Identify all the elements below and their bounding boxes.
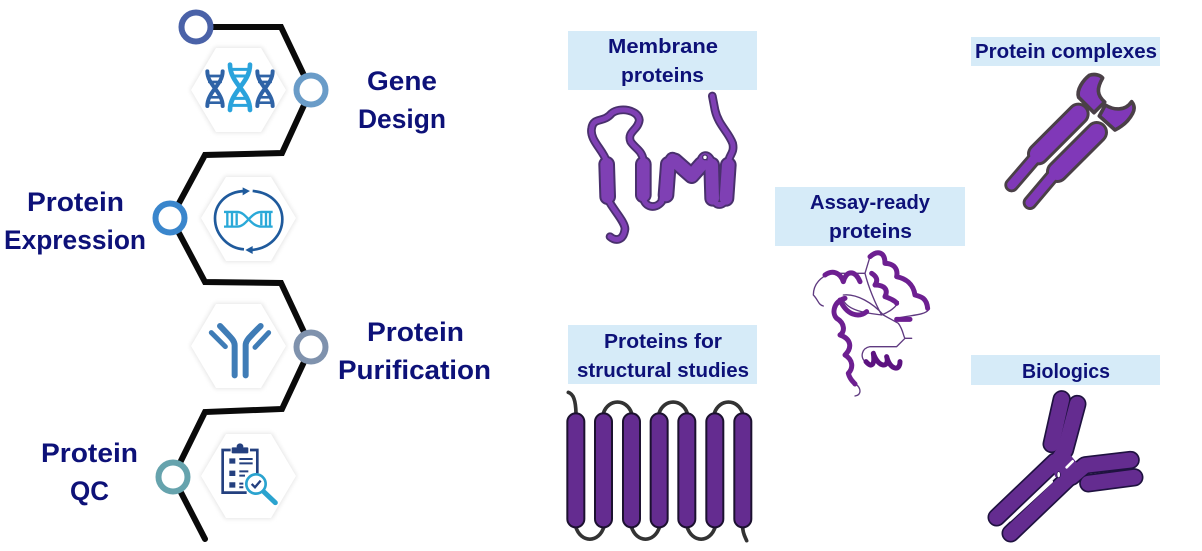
panel: membrane proteins: Membrane bbox=[608, 36, 718, 58]
node: protein purification bbox=[296, 332, 326, 362]
panel: assay-ready proteins bbox=[775, 187, 965, 396]
heading: protein expression: Expression bbox=[4, 225, 146, 255]
node: gene start bbox=[182, 12, 210, 42]
heading: protein purification: Protein bbox=[367, 317, 464, 347]
heading: protein purification: Purification bbox=[338, 355, 491, 385]
heading: gene design: Design bbox=[358, 104, 446, 134]
icon: antibody bbox=[211, 326, 269, 375]
node: protein QC bbox=[158, 462, 188, 492]
node: gene design bbox=[296, 76, 326, 104]
panel: proteins for structural studies: structural studies bbox=[577, 360, 749, 382]
heading: protein QC: Protein bbox=[41, 438, 138, 468]
heading: protein expression: Protein bbox=[27, 187, 124, 217]
workflow connector line bbox=[171, 27, 311, 539]
panel: proteins for structural studies: Proteins for bbox=[604, 331, 722, 353]
icon: protein complex bbox=[1012, 75, 1134, 203]
panel: proteins for structural studies bbox=[567, 325, 757, 541]
panel: protein complexes bbox=[971, 37, 1160, 203]
panel: membrane proteins: proteins bbox=[621, 65, 704, 87]
ribbon: membrane protein bbox=[591, 96, 733, 239]
icon: DNA cycle bbox=[215, 187, 282, 254]
panel: membrane proteins bbox=[568, 31, 757, 239]
icon: antibody bbox=[997, 399, 1134, 533]
panel: assay-ready proteins: Assay-ready bbox=[810, 192, 931, 214]
panel: protein complexes: Protein complexes bbox=[975, 41, 1157, 63]
heading: protein QC: QC bbox=[70, 476, 109, 506]
panel: biologics: Biologics bbox=[1022, 361, 1110, 383]
diagram: transmembrane helices bbox=[567, 392, 751, 541]
hexagon: protein QC bbox=[200, 433, 297, 519]
hexagon: protein expression bbox=[200, 176, 297, 262]
panel: biologics bbox=[971, 355, 1160, 533]
ribbon: protein structure bbox=[813, 252, 928, 396]
hexagon: protein purification bbox=[190, 303, 287, 389]
icon: clipboard with magnifier bbox=[223, 443, 275, 503]
hexagon: gene design bbox=[190, 47, 287, 133]
node: protein expression bbox=[156, 204, 184, 232]
icon: DNA strands bbox=[207, 65, 273, 110]
heading: gene design: Gene bbox=[367, 66, 437, 96]
panel: assay-ready proteins: proteins bbox=[829, 221, 912, 243]
